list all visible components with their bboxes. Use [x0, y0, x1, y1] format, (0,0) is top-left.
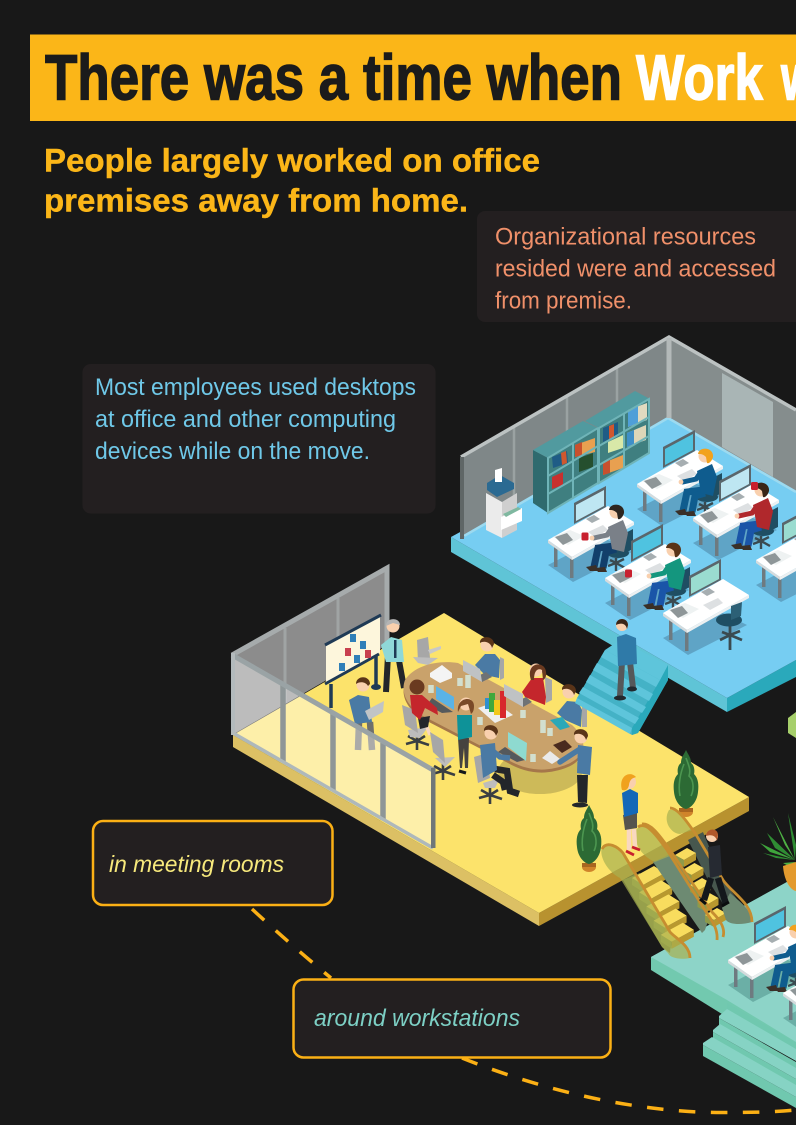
- second teal desk: [783, 939, 796, 1035]
- person right of table: [557, 684, 587, 727]
- laptop teal: [498, 732, 527, 762]
- teal floor with workstations: [651, 813, 796, 1108]
- water glasses and bottles: [431, 675, 550, 762]
- right escalator steps: [675, 848, 726, 927]
- stairs blue: [575, 640, 668, 735]
- laptop blue: [427, 686, 454, 713]
- empty office chair: [716, 602, 742, 650]
- callout: in meeting rooms: in meeting rooms: [109, 851, 284, 877]
- person grey sweater: [586, 505, 633, 572]
- callout: around workstations: around workstations: [314, 1005, 520, 1032]
- dashed connector lines: [252, 909, 796, 1112]
- paper stack: [430, 665, 452, 683]
- icon: plant right: [674, 750, 698, 817]
- workstation desk: [728, 906, 796, 1002]
- front glass wall: [231, 653, 436, 848]
- subheading: premises away from home.: [44, 182, 468, 218]
- bookshelf right: [585, 391, 650, 483]
- mug: [751, 482, 758, 490]
- desk E: [693, 464, 779, 560]
- person at teal desk: [766, 925, 796, 992]
- title banner: [30, 34, 796, 121]
- note: employees and devices: [82, 364, 436, 514]
- note: organizational resources: Organizational resources: [495, 224, 756, 250]
- callout: around workstations: [294, 980, 610, 1058]
- person walking on stairs: [614, 619, 637, 700]
- escalator handrails: [602, 808, 752, 958]
- person front man seated: [480, 725, 519, 794]
- desk A: [548, 486, 634, 582]
- note: employees and devices: at office and other computing: [95, 406, 396, 433]
- middle panel: [653, 853, 710, 933]
- glass partition walls: [460, 337, 796, 539]
- bookshelf left: [533, 421, 598, 513]
- mug: [625, 570, 632, 578]
- person walking in black suit: [700, 829, 729, 906]
- note: organizational resources: from premise.: [495, 288, 632, 314]
- chair woman seated: [402, 705, 429, 750]
- calculator: [542, 751, 560, 764]
- mug: [582, 532, 588, 540]
- chart on table: [478, 691, 513, 723]
- conference table: [404, 660, 583, 773]
- escalators: [601, 808, 752, 959]
- chair front man: [474, 753, 502, 804]
- empty chair at head of table: [413, 637, 441, 665]
- person blonde woman: [675, 449, 722, 516]
- note: employees and devices: Most employees used desktops: [95, 374, 416, 401]
- tablet: [550, 717, 570, 730]
- left escalator steps: [632, 866, 694, 949]
- person green shirt: [643, 543, 690, 610]
- whiteboard: [325, 615, 381, 708]
- laptop grey 1: [463, 660, 492, 682]
- subheading: People largely worked on office: [44, 142, 540, 178]
- person red shirt: [731, 483, 778, 550]
- title text dark: There was a time when: [45, 42, 622, 114]
- yellow meeting floor: [231, 568, 749, 926]
- note: employees and devices: devices while on the move.: [95, 438, 370, 465]
- subheading: [44, 142, 540, 218]
- person top of table: [475, 637, 504, 680]
- note: organizational resources: resided were and accessed: [495, 256, 776, 282]
- dark panel below floor: [688, 832, 742, 912]
- desk D: [637, 430, 723, 526]
- icon: plant front left: [577, 805, 601, 872]
- escalator glass: [601, 810, 693, 959]
- icon: potted palm: [760, 813, 796, 891]
- person woman seated at left: [410, 680, 438, 735]
- seated people behind table: [475, 637, 587, 727]
- desk C: [663, 559, 749, 655]
- person standing man at right: [560, 729, 592, 808]
- desk B: [605, 524, 691, 620]
- person standing woman teal: [457, 698, 474, 773]
- left stringer: [623, 873, 672, 953]
- blue office floor: [451, 337, 796, 712]
- title text white: Work: [636, 42, 763, 114]
- desk F: [756, 506, 796, 602]
- green platform corner: [788, 712, 796, 738]
- callout: in meeting rooms: [93, 821, 332, 905]
- notebook: [553, 740, 572, 753]
- table shadow: [498, 750, 582, 794]
- person standing blonde woman: [621, 774, 640, 855]
- note: organizational resources: [477, 211, 796, 322]
- back wall of glass room: [232, 568, 387, 735]
- teal floor steps: [703, 1003, 796, 1108]
- person red sweater woman: [522, 664, 552, 705]
- printer cabinet: [486, 468, 522, 538]
- person grey hair standing: [381, 619, 404, 692]
- empty grey chair: [430, 732, 455, 780]
- person standing with laptop: [349, 677, 384, 750]
- laptop grey 2: [504, 684, 532, 707]
